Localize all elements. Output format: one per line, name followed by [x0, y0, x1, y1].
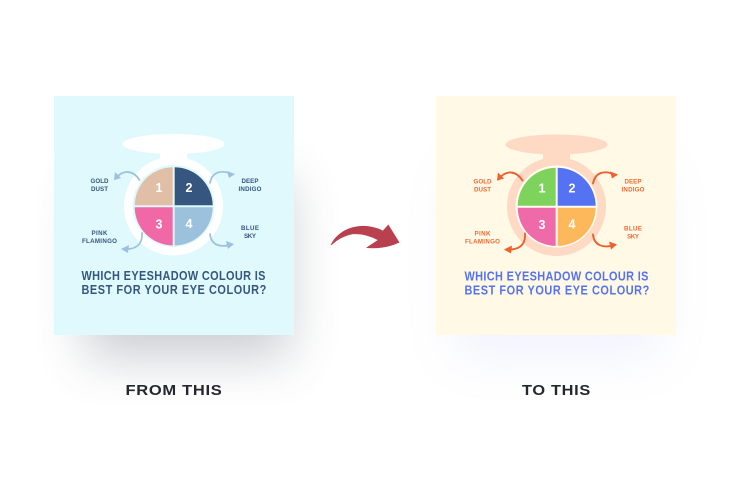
panel: from this card — [54, 96, 294, 335]
question heading — [464, 269, 649, 298]
option labels: GOLD — [474, 178, 492, 186]
compact mirror shape — [122, 134, 224, 256]
question heading: WHICH EYESHADOW COLOUR IS — [82, 268, 265, 283]
eyeshadow palette — [132, 165, 214, 247]
option labels: INDIGO — [622, 186, 645, 194]
card background — [54, 96, 294, 335]
eyeshadow palette: 1 — [539, 182, 546, 196]
arrowheads — [497, 172, 618, 254]
option labels — [82, 178, 262, 245]
card shadow: right — [455, 170, 660, 355]
option labels — [465, 178, 645, 246]
eyeshadow palette: 4 — [186, 217, 193, 231]
card shadow: left — [85, 180, 290, 358]
eyeshadow palette: 2 — [186, 181, 193, 195]
option labels: INDIGO — [238, 186, 262, 193]
option labels: GOLD — [90, 178, 109, 185]
arrows — [115, 172, 233, 249]
option labels: DEEP — [624, 178, 642, 186]
question heading: BEST FOR YOUR EYE COLOUR? — [464, 283, 649, 298]
option labels: FLAMINGO — [465, 238, 500, 246]
arrows — [498, 172, 616, 250]
card background — [436, 96, 676, 335]
caption: from this: FROM THIS — [126, 383, 222, 399]
eyeshadow palette — [516, 166, 598, 248]
eyeshadow palette: 2 — [569, 182, 576, 196]
caption: to this: TO THIS — [522, 383, 591, 399]
option labels: BLUE — [241, 225, 259, 232]
option labels: SKY — [627, 234, 640, 240]
option labels: DUST — [91, 186, 108, 193]
compact mirror shape — [506, 134, 608, 256]
option labels: BLUE — [624, 226, 642, 232]
option labels: SKY — [244, 233, 257, 240]
question heading — [82, 268, 266, 297]
panel: to this card — [436, 96, 676, 335]
arrowheads — [114, 171, 235, 253]
eyeshadow palette: 3 — [156, 218, 163, 232]
option labels: DEEP — [242, 178, 258, 185]
question heading: BEST FOR YOUR EYE COLOUR? — [82, 282, 266, 297]
eyeshadow palette: 3 — [539, 218, 546, 232]
arrow: from left to right — [331, 225, 399, 248]
option labels: DUST — [474, 186, 491, 194]
option labels: FLAMINGO — [82, 238, 117, 245]
option labels: PINK — [92, 230, 108, 237]
question heading: WHICH EYESHADOW COLOUR IS — [464, 269, 648, 284]
eyeshadow palette: 4 — [569, 218, 576, 232]
eyeshadow palette: 1 — [156, 181, 163, 195]
option labels: PINK — [474, 230, 491, 238]
